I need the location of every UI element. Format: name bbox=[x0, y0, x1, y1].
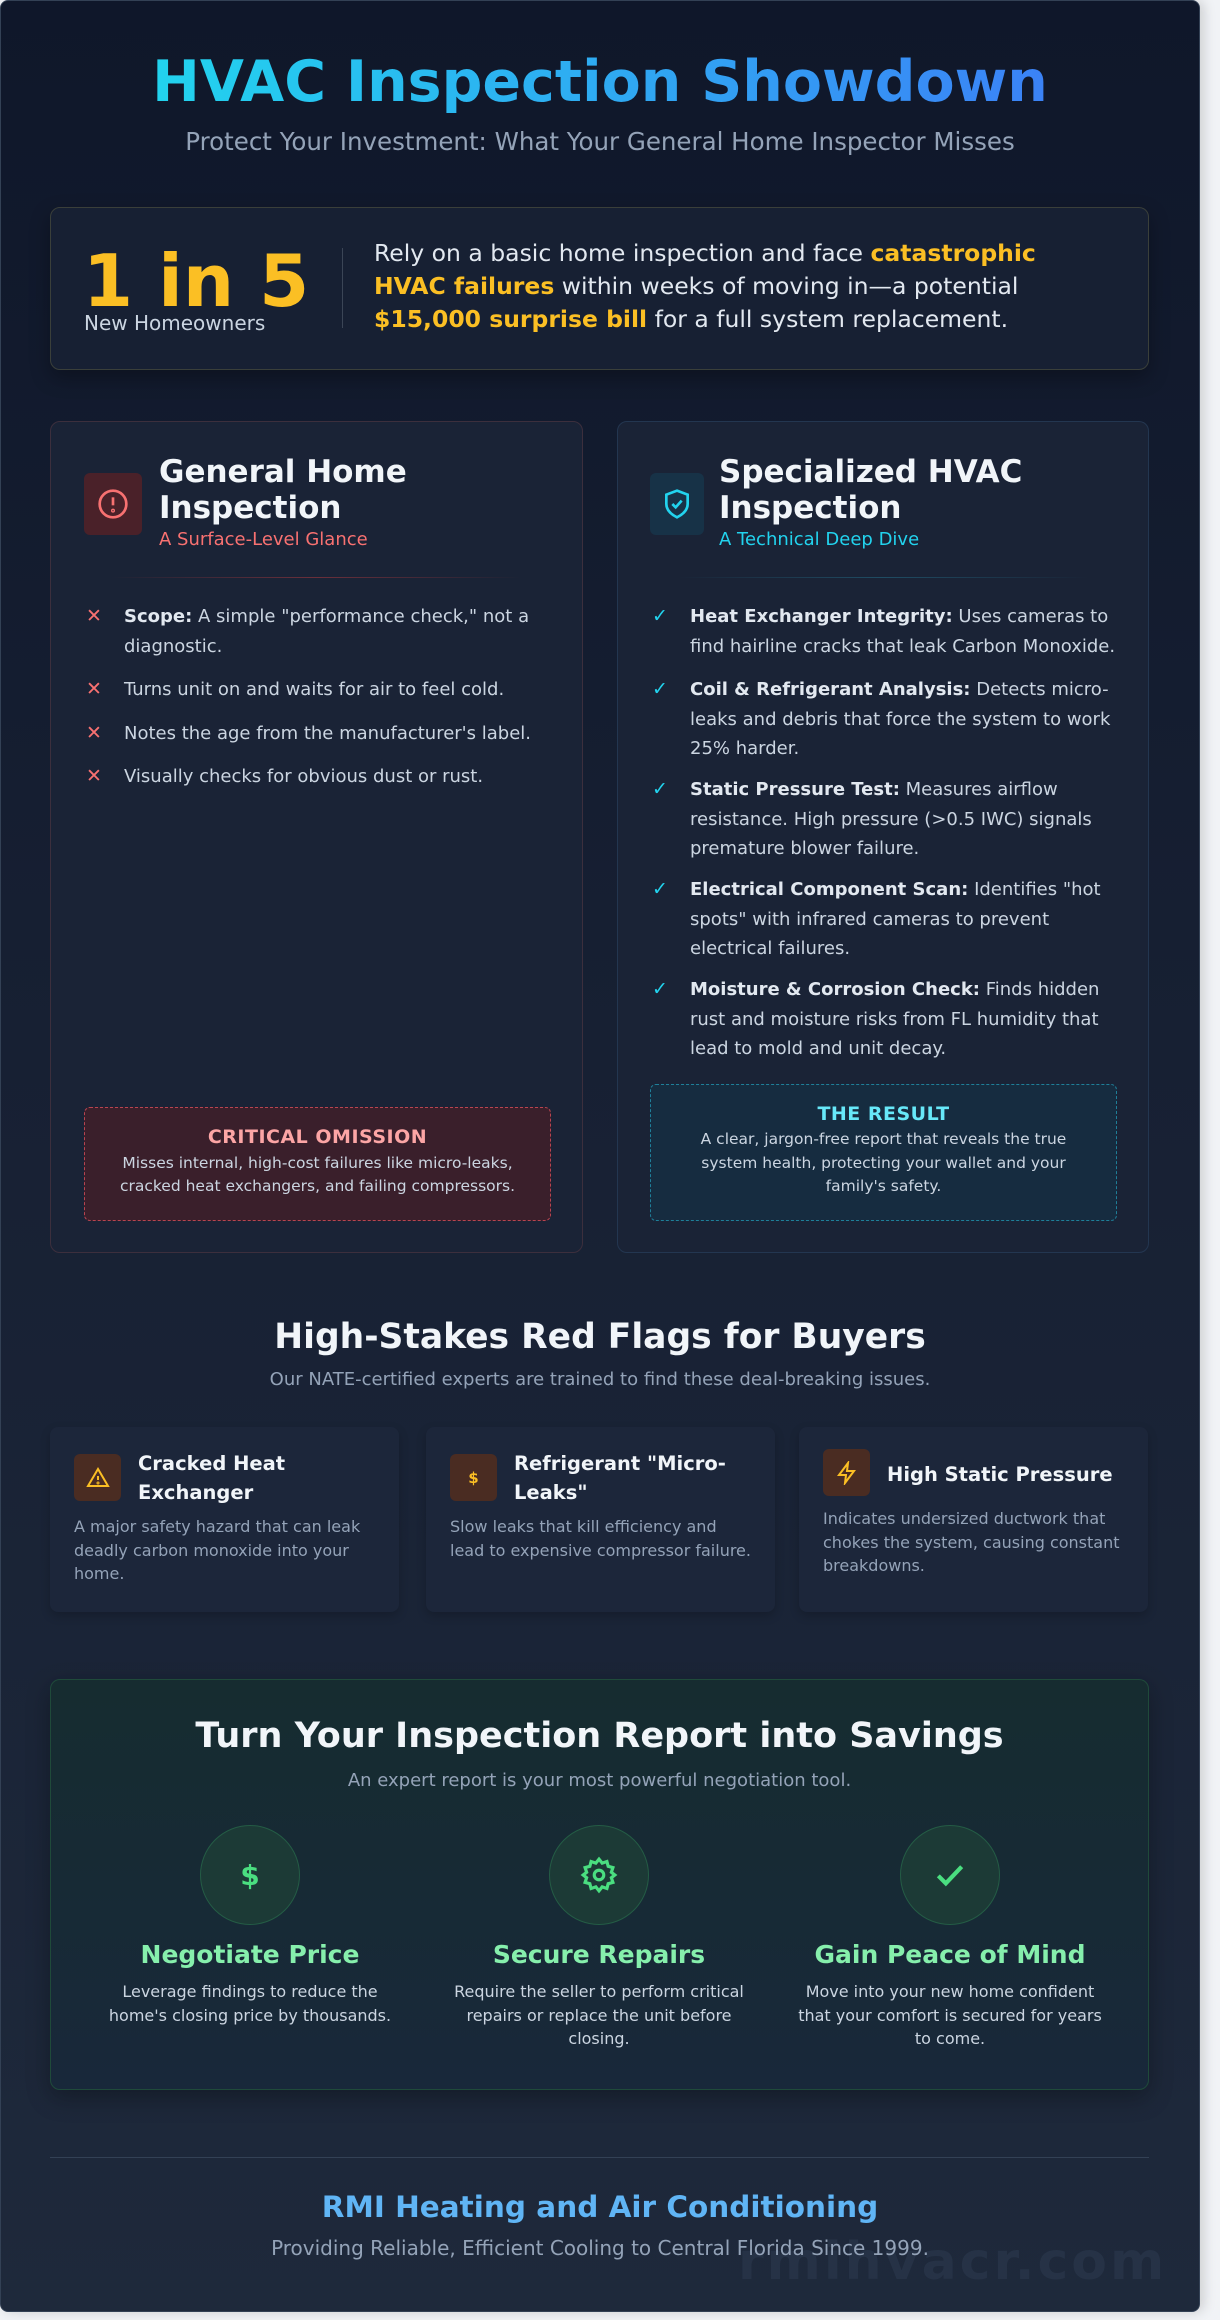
benefit: secure repairs: Secure Repairs bbox=[493, 1940, 705, 1969]
heading: Inspection bbox=[719, 490, 901, 526]
benefit: peace of mind: that your comfort is secured for years bbox=[798, 2006, 1102, 2024]
heading: Inspection bbox=[159, 490, 341, 526]
icon: check bbox=[900, 1825, 1000, 1925]
icon: dollar bbox=[450, 1454, 497, 1501]
panel: specialized hvac inspection: ✓ bbox=[652, 878, 668, 900]
list: hvac checks: Heat Exchanger Integrity: Uses cameras to find hairline cracks that leak Carbon Monoxide. bbox=[690, 606, 1115, 656]
benefit: negotiate price: Negotiate Price bbox=[141, 1940, 359, 1969]
card: cracked heat exchanger bbox=[50, 1427, 399, 1612]
list: general checks: Scope: A simple "performance check," not a diagnostic. bbox=[124, 606, 529, 656]
icon: dollar: $ bbox=[468, 1468, 479, 1486]
list: general checks: Turns unit on and waits for air to feel cold. bbox=[124, 679, 504, 700]
panel: specialized hvac inspection bbox=[617, 421, 1149, 1253]
list: hvac checks bbox=[652, 605, 1115, 1059]
callout: critical omission: Misses internal, high-cost failures like micro-leaks, bbox=[122, 1154, 513, 1172]
panel: specialized hvac inspection: ✓ bbox=[652, 778, 668, 800]
panel: savings bbox=[50, 1679, 1149, 2090]
footer: company name: RMI Heating and Air Conditioning bbox=[322, 2190, 878, 2224]
heading: savings: Turn Your Inspection Report into Savings bbox=[195, 1716, 1004, 1756]
icon: shield bbox=[650, 473, 704, 535]
callout: critical omission: CRITICAL OMISSION bbox=[208, 1126, 427, 1148]
callout: the result: A clear, jargon-free report that reveals the true bbox=[701, 1130, 1066, 1148]
list: general checks bbox=[86, 605, 531, 787]
benefit: negotiate price bbox=[109, 1825, 391, 2024]
benefit: secure repairs: repairs or replace the unit before bbox=[466, 2006, 732, 2024]
benefit: negotiate price: Leverage findings to reduce the bbox=[122, 1982, 378, 2001]
benefit: secure repairs: Require the seller to perform critical bbox=[454, 1982, 744, 2001]
list: hvac checks: Coil & Refrigerant Analysis: Detects micro-leaks and debris that force the system to work 25% harder. bbox=[690, 679, 1110, 759]
icon: dollar: $ bbox=[240, 1858, 260, 1892]
list: general checks: Notes the age from the manufacturer's label. bbox=[124, 723, 531, 744]
list: hvac checks: Electrical Component Scan: Identifies "hot spots" with infrared cameras to prevent electrical failures. bbox=[690, 879, 1101, 959]
heading bbox=[719, 454, 1022, 526]
benefit: secure repairs: closing. bbox=[568, 2029, 630, 2048]
subheading: savings: An expert report is your most powerful negotiation tool. bbox=[348, 1770, 851, 1791]
benefit: secure repairs bbox=[454, 1825, 744, 2048]
panel: general home inspection: ✕ bbox=[86, 678, 102, 700]
subheading: A Surface-Level Glance bbox=[159, 529, 368, 550]
card: refrigerant micro-leaks bbox=[426, 1427, 775, 1612]
panel: general home inspection: ✕ bbox=[86, 722, 102, 744]
callout: the result bbox=[650, 1084, 1117, 1221]
card: refrigerant micro-leaks: Refrigerant "Micro- bbox=[514, 1452, 726, 1475]
card: cracked heat exchanger: Cracked Heat bbox=[138, 1452, 285, 1475]
icon: gear bbox=[549, 1825, 649, 1925]
watermark: rmihvacr.com bbox=[738, 2232, 1167, 2292]
panel: general home inspection: ✕ bbox=[86, 605, 102, 627]
benefit: peace of mind: to come. bbox=[915, 2029, 985, 2048]
callout: critical omission bbox=[84, 1107, 551, 1221]
panel: specialized hvac inspection: ✓ bbox=[652, 978, 668, 1000]
benefit: peace of mind: Move into your new home confident bbox=[806, 1982, 1094, 2001]
card: high static pressure: High Static Pressure bbox=[887, 1463, 1113, 1486]
list: hvac checks: Moisture & Corrosion Check: Finds hidden rust and moisture risks from FL humidity that lead to mold and unit decay. bbox=[690, 979, 1099, 1059]
callout: critical omission: cracked heat exchangers, and failing compressors. bbox=[120, 1177, 515, 1195]
panel: specialized hvac inspection: ✓ bbox=[652, 605, 668, 627]
card: cracked heat exchanger: Exchanger bbox=[138, 1481, 253, 1504]
panel: specialized hvac inspection: ✓ bbox=[652, 678, 668, 700]
panel: general home inspection: ✕ bbox=[86, 765, 102, 787]
stat text: Rely on a basic home inspection and face catastrophic HVAC failures within weeks of moving in—a potential $15,000 surprise bill for a full system replacement. bbox=[374, 239, 1036, 333]
icon: dollar bbox=[200, 1825, 300, 1925]
stat callout bbox=[50, 207, 1149, 370]
benefit: negotiate price: home's closing price by thousands. bbox=[109, 2006, 391, 2024]
list: hvac checks: Static Pressure Test: Measures airflow resistance. High pressure (>0.5 IWC) signals premature blower failure. bbox=[690, 779, 1092, 859]
subheading: red flags: Our NATE-certified experts are trained to find these deal-breaking issues. bbox=[270, 1369, 930, 1390]
heading: red flags: High-Stakes Red Flags for Buyers bbox=[274, 1317, 926, 1357]
heading: General Home bbox=[159, 454, 407, 490]
card: cracked heat exchanger: A major safety hazard that can leak deadly carbon monoxide into your home. bbox=[74, 1517, 360, 1583]
benefit: peace of mind: Gain Peace of Mind bbox=[814, 1940, 1085, 1969]
list: general checks: Visually checks for obvious dust or rust. bbox=[124, 766, 483, 787]
panel: general home inspection bbox=[50, 421, 583, 1253]
callout: the result: THE RESULT bbox=[817, 1103, 950, 1125]
callout: the result: family's safety. bbox=[826, 1177, 941, 1195]
title: HVAC Inspection Showdown bbox=[152, 49, 1048, 115]
subheading: A Technical Deep Dive bbox=[719, 529, 919, 550]
icon: lightning bbox=[823, 1449, 870, 1496]
icon: alert bbox=[84, 473, 142, 535]
card: high static pressure: Indicates undersized ductwork that chokes the system, causing constant breakdowns. bbox=[823, 1509, 1120, 1575]
footer: tagline: Providing Reliable, Efficient Cooling to Central Florida Since 1999. bbox=[271, 2236, 929, 2260]
subtitle: Protect Your Investment: What Your General Home Inspector Misses bbox=[185, 127, 1015, 156]
card: refrigerant micro-leaks: lead to expensive compressor failure. bbox=[450, 1540, 751, 1560]
stat number: 1 in 5 bbox=[83, 239, 309, 323]
card: refrigerant micro-leaks: Slow leaks that kill efficiency and bbox=[450, 1517, 717, 1536]
icon: warning bbox=[74, 1454, 121, 1501]
card: refrigerant micro-leaks: Leaks" bbox=[514, 1481, 588, 1504]
stat label: New Homeowners bbox=[84, 311, 265, 335]
card: high static pressure bbox=[799, 1427, 1148, 1612]
callout: the result: system health, protecting your wallet and your bbox=[701, 1154, 1066, 1172]
heading: Specialized HVAC bbox=[719, 454, 1022, 490]
heading bbox=[159, 454, 407, 526]
benefit: peace of mind bbox=[798, 1825, 1102, 2048]
